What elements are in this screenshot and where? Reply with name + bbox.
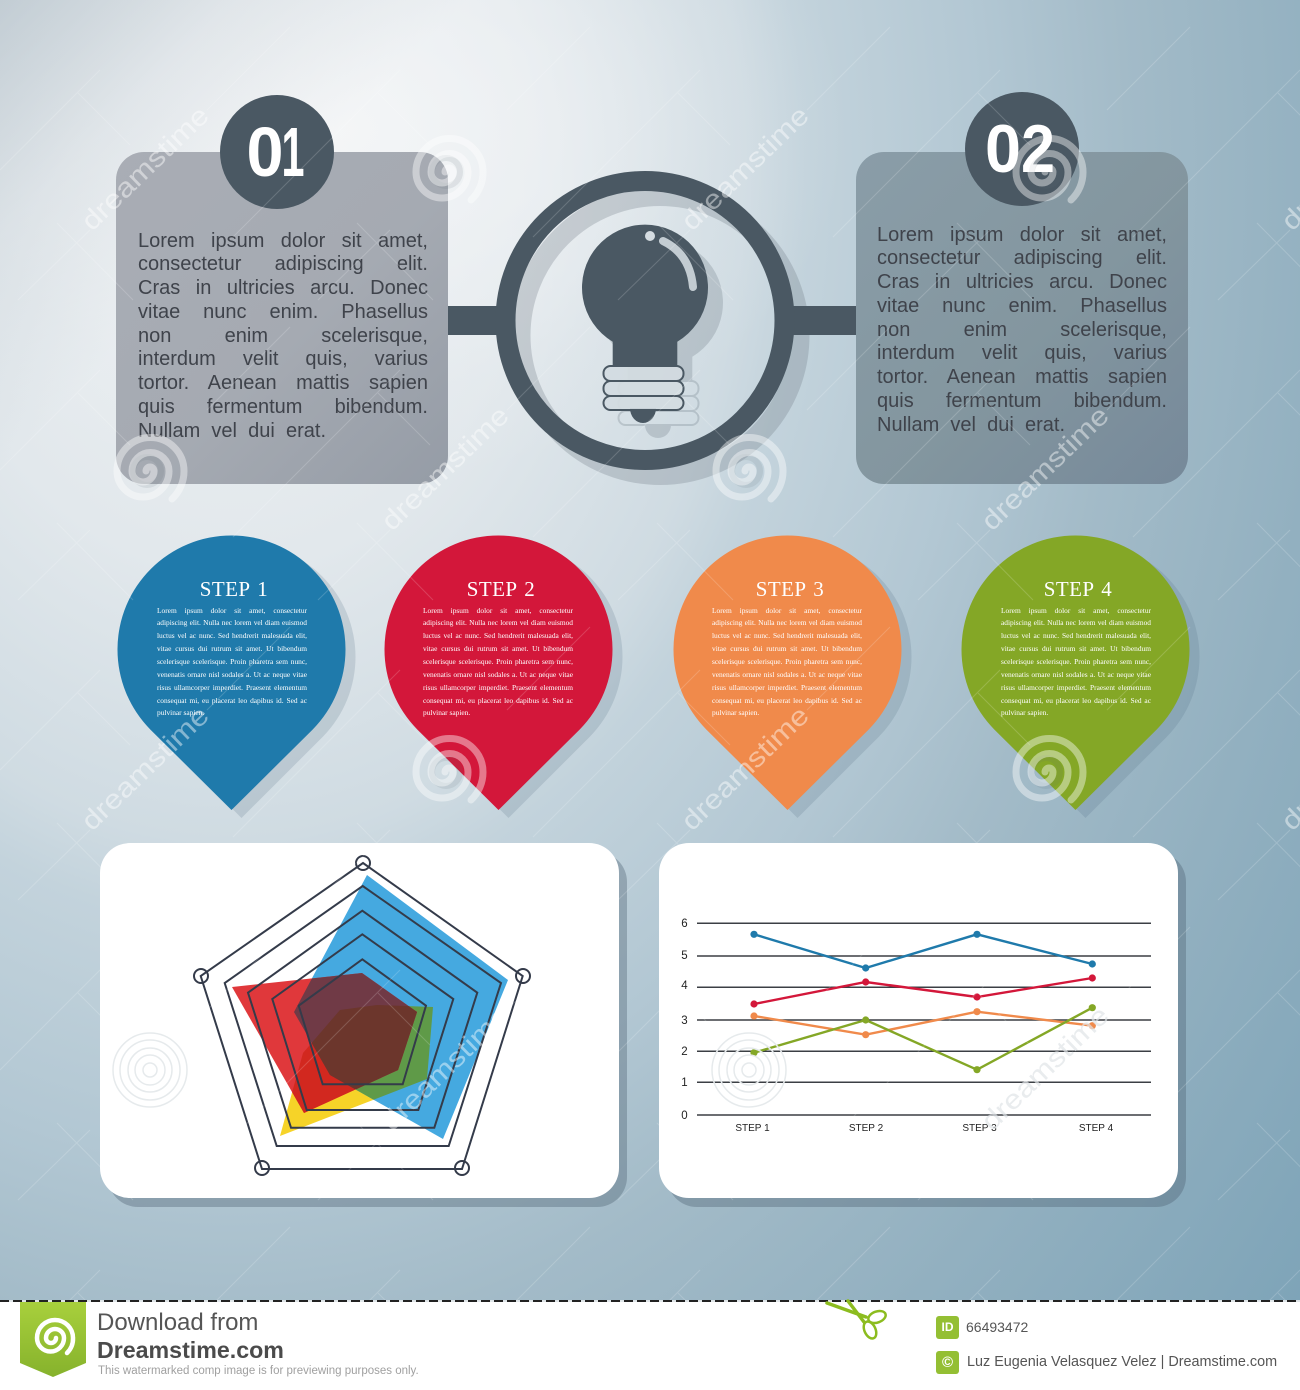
footer heading: Download from — [97, 1309, 258, 1336]
icon: lightbulb — [582, 225, 708, 423]
axis numbers — [681, 918, 688, 1122]
panel: step 2 — [384, 536, 622, 818]
heading: step 4: STEP 4 — [1044, 577, 1112, 601]
text: step 1: luctus vel ac nunc. Sed hendrerit malesuada elit, — [157, 631, 307, 640]
text: step 1 — [157, 606, 307, 717]
text block 01 — [138, 230, 428, 442]
text: step 1: Lorem ipsum dolor sit amet, consectetur — [157, 606, 307, 614]
heading: step 2: STEP 2 — [467, 577, 535, 601]
panel: step 4 — [962, 536, 1200, 818]
text: step 3: consequat mi, eu placerat leo dapibus id. Sed ac — [712, 696, 862, 705]
text: step 2: Lorem ipsum dolor sit amet, consectetur — [423, 606, 573, 614]
ring shadow — [520, 196, 800, 475]
text: step 2: risus ullamcorper imperdiet. Praesent elementum — [423, 683, 573, 692]
text: step 2: luctus vel ac nunc. Sed hendrerit malesuada elit, — [423, 631, 573, 640]
axis numbers: 0 — [681, 1110, 688, 1122]
footer brand: Dreamstime.com — [97, 1337, 284, 1363]
axis numbers: 2 — [681, 1046, 688, 1058]
cut line — [0, 1300, 1300, 1302]
icon: dreamstime badge — [20, 1302, 86, 1377]
text: step 4 — [1001, 606, 1151, 717]
watermark text: dreamstime — [75, 700, 215, 836]
connector bars — [448, 306, 856, 335]
badge 01 — [220, 95, 334, 209]
icon: scissors — [825, 1299, 887, 1340]
watermark text: dreamstime — [375, 400, 515, 536]
text block 02: quis fermentum bibendum. — [877, 390, 1167, 412]
icon: copyright badge — [936, 1351, 959, 1374]
icon: watermark spirals — [113, 138, 1083, 1107]
text block 01: vitae nunc enim. Phasellus — [138, 301, 428, 323]
text: step 3: Lorem ipsum dolor sit amet, consectetur — [712, 606, 862, 614]
watermark text — [75, 100, 1300, 1136]
axis numbers: 5 — [681, 950, 688, 962]
text block 02: interdum velit quis, varius — [877, 342, 1167, 364]
watermark text: dreamstime — [675, 100, 815, 236]
panel: line chart card — [659, 843, 1178, 1198]
icon: id badge: ID — [942, 1320, 954, 1334]
text: step 3: risus ullamcorper imperdiet. Praesent elementum — [712, 683, 862, 692]
step labels: STEP 3 — [962, 1123, 997, 1134]
text: step 1: vitae cursus dui rutrum sit amet. Ut bibendum — [157, 644, 307, 653]
text: step 4: consequat mi, eu placerat leo dapibus id. Sed ac — [1001, 696, 1151, 705]
text block 02 — [877, 224, 1167, 436]
panel: 02 — [856, 92, 1188, 484]
text block 02: tortor. Aenean mattis sapien — [877, 366, 1167, 388]
text block 01: interdum velit quis, varius — [138, 348, 428, 370]
text block 01: quis fermentum bibendum. — [138, 396, 428, 418]
text: step 3: vitae cursus dui rutrum sit amet. Ut bibendum — [712, 644, 862, 653]
axis numbers: 6 — [681, 918, 688, 930]
watermark text: dreamstime — [75, 100, 215, 236]
series orange — [750, 1008, 1096, 1038]
text: step 3: luctus vel ac nunc. Sed hendrerit malesuada elit, — [712, 631, 862, 640]
text: step 4: scelerisque scelerisque. Proin pharetra sem nunc, — [1001, 657, 1151, 666]
heading: step 1: STEP 1 — [200, 577, 268, 601]
icon: id badge — [936, 1316, 959, 1339]
footer note: This watermarked comp image is for previewing purposes only. — [98, 1365, 419, 1377]
text block 02: Cras in ultricies arcu. Donec — [877, 271, 1167, 293]
series red — [750, 974, 1096, 1008]
watermark text: dreamstime — [375, 1000, 515, 1136]
text: step 2: adipiscing elit. Nulla nec lorem vel diam euismod — [423, 618, 573, 627]
axis numbers: 4 — [681, 980, 688, 992]
text: step 3: adipiscing elit. Nulla nec lorem vel diam euismod — [712, 618, 862, 627]
text: step 4: pulvinar sapien. — [1001, 708, 1048, 717]
text block 01: tortor. Aenean mattis sapien — [138, 372, 428, 394]
watermark text: dreamstime — [675, 700, 815, 836]
text block 02: non enim scelerisque, — [877, 319, 1167, 341]
panel: radar chart card — [100, 843, 619, 1198]
text: step 1: venenatis ornare nisl sodales a. Ut ac neque vitae — [157, 670, 307, 679]
text block 01: non enim scelerisque, — [138, 325, 428, 347]
text block 01: Lorem ipsum dolor sit amet, — [138, 230, 428, 252]
radar chart — [193, 855, 531, 1176]
text: step 4: vitae cursus dui rutrum sit amet. Ut bibendum — [1001, 644, 1151, 653]
icon: copyright badge: © — [942, 1354, 953, 1371]
text: step 1: pulvinar sapien. — [157, 708, 204, 717]
footer strip — [0, 1300, 1300, 1390]
watermark text: dreamstime — [975, 1000, 1115, 1136]
panel: step 3 — [674, 536, 912, 818]
text: step 3 — [712, 606, 862, 717]
badge 02 — [965, 92, 1079, 206]
text: step 1: scelerisque scelerisque. Proin pharetra sem nunc, — [157, 657, 307, 666]
panel: 01 — [116, 95, 448, 484]
text: step 1: adipiscing elit. Nulla nec lorem vel diam euismod — [157, 618, 307, 627]
badge 01: 1 — [282, 113, 304, 191]
step labels — [735, 1123, 1114, 1134]
step labels: STEP 1 — [735, 1123, 770, 1134]
icon: lightbulb shadow — [597, 240, 723, 438]
text: step 2: scelerisque scelerisque. Proin pharetra sem nunc, — [423, 657, 573, 666]
image id: 66493472 — [966, 1319, 1028, 1335]
heading: step 3: STEP 3 — [756, 577, 824, 601]
series green — [750, 1004, 1096, 1073]
text block 01: Cras in ultricies arcu. Donec — [138, 277, 428, 299]
text: step 4: risus ullamcorper imperdiet. Praesent elementum — [1001, 683, 1151, 692]
line chart — [681, 918, 1151, 1134]
panel: step 1 — [118, 536, 356, 818]
panel background 01 — [116, 152, 448, 484]
text: step 1: risus ullamcorper imperdiet. Praesent elementum — [157, 683, 307, 692]
text: step 2: consequat mi, eu placerat leo dapibus id. Sed ac — [423, 696, 573, 705]
text block 02: vitae nunc enim. Phasellus — [877, 295, 1167, 317]
text: step 2: vitae cursus dui rutrum sit amet. Ut bibendum — [423, 644, 573, 653]
text: step 3: venenatis ornare nisl sodales a. Ut ac neque vitae — [712, 670, 862, 679]
series blue — [750, 931, 1096, 972]
text: step 4: Lorem ipsum dolor sit amet, consectetur — [1001, 606, 1151, 614]
badge 02: 2 — [1021, 111, 1055, 187]
text block 01: Nullam vel dui erat. — [138, 420, 326, 442]
text: step 4: venenatis ornare nisl sodales a. Ut ac neque vitae — [1001, 670, 1151, 679]
text: step 2 — [423, 606, 573, 717]
text: step 1: consequat mi, eu placerat leo dapibus id. Sed ac — [157, 696, 307, 705]
watermark text: dreamstime — [975, 400, 1115, 536]
text block 02: consectetur adipiscing elit. — [877, 247, 1167, 269]
axis numbers: 1 — [681, 1077, 688, 1089]
text: step 4: adipiscing elit. Nulla nec lorem vel diam euismod — [1001, 618, 1151, 627]
text block 01: consectetur adipiscing elit. — [138, 253, 428, 275]
ring — [506, 181, 784, 460]
connector and lightbulb ring — [448, 171, 856, 485]
step labels: STEP 2 — [849, 1123, 884, 1134]
badge 01: 0 — [246, 113, 284, 191]
text: step 4: luctus vel ac nunc. Sed hendrerit malesuada elit, — [1001, 631, 1151, 640]
text: step 2: pulvinar sapien. — [423, 708, 470, 717]
text block 02: Nullam vel dui erat. — [877, 414, 1065, 436]
text block 02: Lorem ipsum dolor sit amet, — [877, 224, 1167, 246]
step labels: STEP 4 — [1079, 1123, 1114, 1134]
badge 02: 0 — [985, 111, 1021, 187]
text: step 3: pulvinar sapien. — [712, 708, 759, 717]
axis numbers: 3 — [681, 1015, 688, 1027]
author credit: Luz Eugenia Velasquez Velez | Dreamstime.com — [967, 1354, 1277, 1370]
text: step 2: venenatis ornare nisl sodales a. Ut ac neque vitae — [423, 670, 573, 679]
text: step 3: scelerisque scelerisque. Proin pharetra sem nunc, — [712, 657, 862, 666]
panel background 02 — [856, 152, 1188, 484]
